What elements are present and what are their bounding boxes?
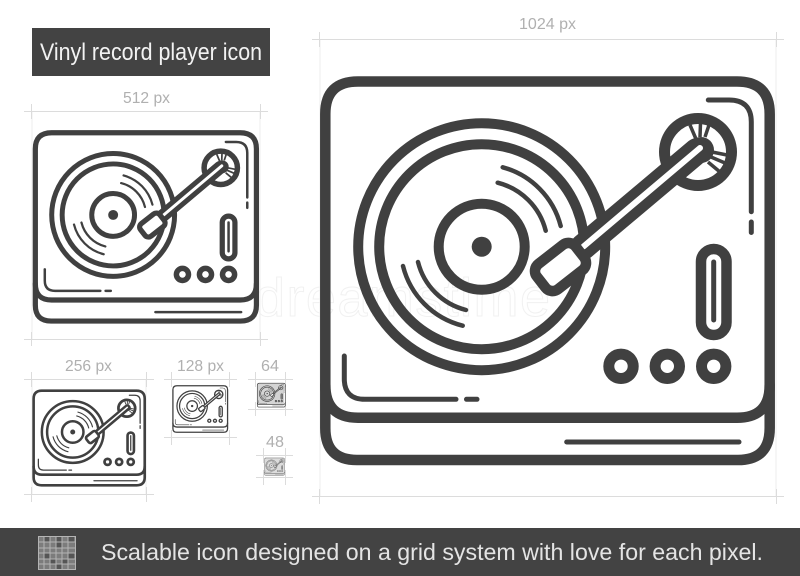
icon: turntable 128 px [173,386,228,432]
tonearm pivot [664,118,732,186]
icon: pixel grid [38,536,76,570]
icon: turntable 1024 px [325,82,770,460]
tone arm lock accent [708,100,751,232]
size guide: 48: 48 [266,434,284,451]
icon: turntable 256 px [34,391,145,485]
record label [439,204,525,290]
watermark: dreamstime [255,268,550,328]
headshell [531,239,590,295]
icon: turntable 48 px [264,458,285,475]
size guide: 128 px: 128 px [177,358,224,375]
size guide: 64: 64 [261,358,279,375]
footer bar [0,528,800,576]
size guide: 48 [256,434,293,485]
turntable body [325,82,770,418]
size guide: 256 px: 256 px [65,358,112,375]
size guide: 1024 px: 1024 px [519,16,576,33]
turntable base [325,385,770,460]
base accent line [567,440,739,444]
footer caption: Scalable icon designed on a grid system with love for each pixel. [101,539,763,565]
record grooves [403,167,561,326]
corner accent [344,356,477,399]
size guide: 512 px: 512 px [123,90,170,107]
size guide: 512 px [24,90,268,346]
icon: turntable 64 px [257,383,285,407]
speed slider [701,249,726,335]
size guide: 256 px [24,358,154,502]
control knobs [609,354,726,378]
spindle [472,237,492,257]
title banner: Vinyl record player icon [40,39,262,66]
size guide: 128 px [164,358,237,445]
platter outer ring [358,123,605,370]
title banner [32,28,270,76]
icon: turntable 512 px [35,133,256,321]
tonearm [583,148,700,247]
size guide: 64 [248,358,293,416]
vinyl record ring [379,144,584,349]
